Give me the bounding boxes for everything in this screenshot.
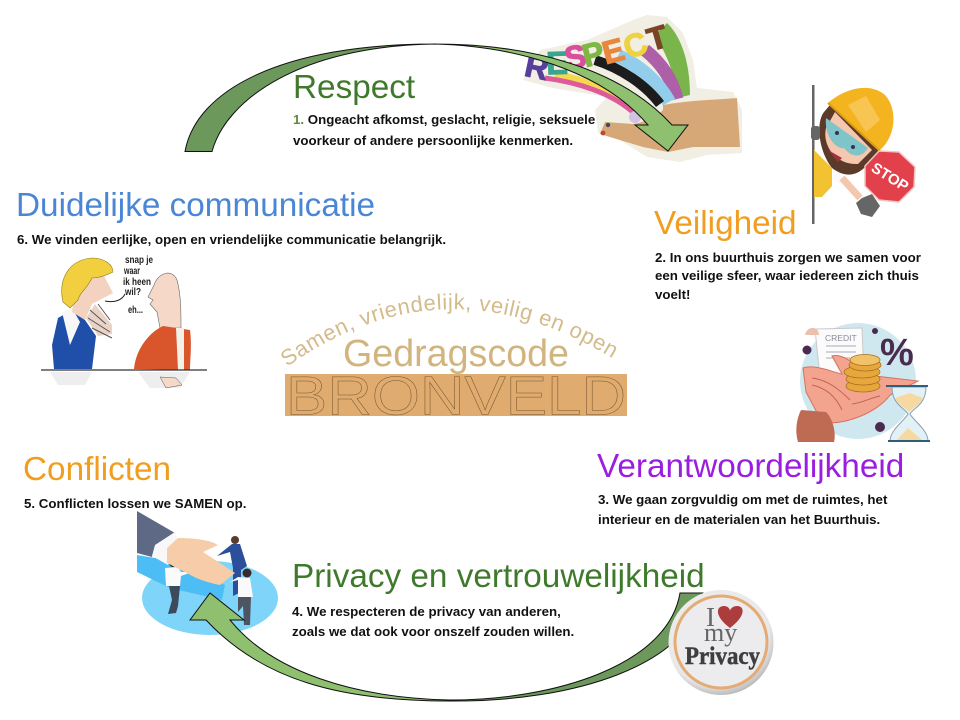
logo wordmark: BRONVELD [286, 364, 626, 426]
speech text: waar [123, 266, 140, 277]
illustration: credit hand with coins and hourglass [796, 323, 930, 442]
logo banner [285, 374, 627, 416]
illustration text: RESPECT letters: P [579, 34, 608, 74]
illustration text: RESPECT letters [522, 18, 672, 87]
icon: hourglass [886, 386, 930, 441]
speech text [123, 255, 153, 316]
icon: heart [718, 606, 743, 628]
illustration text: STOP: STOP [868, 159, 911, 195]
heading: Conflicten: Conflicten [23, 451, 171, 488]
illustration: worker with stop sign [811, 85, 915, 224]
illustration text: Privacy: Privacy [685, 643, 760, 670]
speech text: snap je [125, 255, 153, 266]
text: privacy description: 4. We respecteren de privacy van anderen, [292, 604, 561, 619]
text: conflicten description: 5. Conflicten lossen we SAMEN op. [24, 496, 246, 511]
illustration: handshake with people [137, 511, 278, 635]
illustration: two men talking [41, 255, 207, 388]
text: veiligheid description: 2. In ons buurthuis zorgen we samen voor [655, 250, 921, 265]
table line [41, 369, 207, 371]
illustration text: RESPECT letters: S [562, 37, 589, 77]
text: respect description: 1. [293, 112, 304, 127]
icon: money bag [796, 410, 835, 442]
icon: percent sign: % [880, 332, 914, 374]
man in blue suit [52, 258, 125, 369]
left person [165, 567, 192, 586]
text: veiligheid description: een veilige sfeer, waar iedereen zich thuis [655, 268, 919, 283]
speech text: ik heen [123, 277, 151, 288]
text: verantwoordelijkheid description: 3. We gaan zorgvuldig om met de ruimtes, het [598, 492, 888, 507]
heading: Verantwoordelijkheid: Verantwoordelijkheid [597, 448, 904, 485]
logo title: Gedragscode [343, 333, 569, 375]
illustration text: RESPECT letters: T [643, 18, 672, 58]
text: veiligheid description: voelt! [655, 287, 690, 302]
text: respect description: Ongeacht afkomst, geslacht, religie, seksuele [304, 112, 595, 127]
logo: Gedragscode Bronveld [281, 293, 627, 426]
illustration text: RESPECT letters: C [618, 24, 652, 66]
text: respect description: voorkeur of andere persoonlijke kenmerken. [293, 133, 573, 148]
illustration text: RESPECT letters: E [598, 31, 628, 71]
arrow: top curved arrow from Duidelijke communicatie to Veiligheid [185, 44, 688, 152]
text: privacy description: zoals we dat ook voor onszelf zouden willen. [292, 624, 574, 639]
illustration text: CREDIT: CREDIT [825, 333, 857, 343]
blue person [217, 544, 247, 596]
illustration: privacy badge [668, 590, 774, 695]
heading: Privacy en vertrouwelijkheid: Privacy en vertrouwelijkheid [292, 558, 705, 595]
illustration text: RESPECT letters: E [546, 45, 568, 81]
text: communicatie description: 6. We vinden eerlijke, open en vriendelijke communicatie belangrijk. [17, 232, 446, 247]
illustration text: RESPECT letters: R [522, 47, 552, 87]
speech text: wil? [124, 287, 141, 298]
man in orange sweater [134, 273, 191, 388]
illustration text: my: my [704, 618, 737, 647]
text: verantwoordelijkheid description: interieur en de materialen van het Buurthuis. [598, 512, 880, 527]
speech text: eh... [128, 305, 143, 316]
illustration text: I: I [706, 602, 715, 632]
heading: Respect: Respect [293, 69, 415, 106]
logo arc text: Samen, vriendelijk, veilig en open [281, 293, 616, 364]
shadows [50, 372, 190, 388]
right person [230, 577, 253, 597]
arrow: bottom curved arrow from Privacy to Conflicten [190, 593, 703, 701]
heading: Duidelijke communicatie: Duidelijke communicatie [16, 187, 375, 224]
heading: Veiligheid: Veiligheid [654, 205, 797, 242]
illustration: respect rainbow and hand [522, 15, 742, 162]
sleeve and hand [137, 511, 175, 557]
